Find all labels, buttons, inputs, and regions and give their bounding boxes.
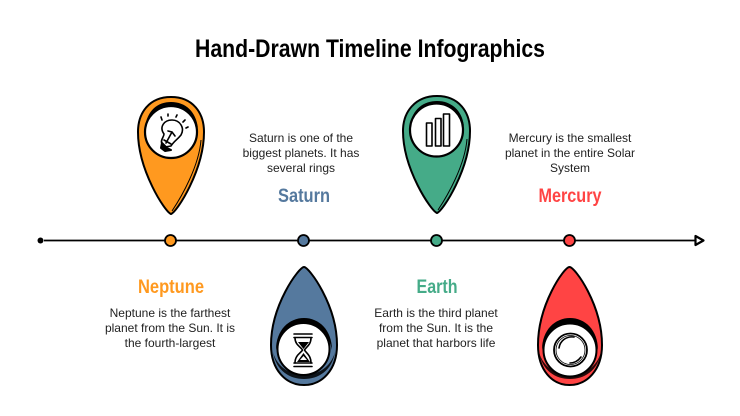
marker: Earth (431, 235, 442, 246)
heading: Neptune: Neptune (138, 277, 204, 298)
pin: Saturn with hourglass icon (271, 267, 337, 385)
heading: Earth: Earth (416, 277, 458, 298)
marker: Neptune (165, 235, 176, 246)
icon: circle (554, 334, 587, 366)
text block: Saturn: Saturn is one of the (249, 131, 353, 145)
icon: hourglass (294, 334, 312, 366)
text block: Neptune (105, 306, 235, 350)
text block: Saturn: biggest planets. It has (243, 146, 359, 160)
heading: Mercury: Mercury (538, 186, 602, 207)
text block: Earth: planet that harbors life (377, 336, 496, 350)
title: Hand-Drawn Timeline Infographics (195, 35, 545, 63)
arrow head (696, 236, 704, 245)
marker: Mercury (564, 235, 575, 246)
text block: Saturn (243, 131, 359, 175)
icon: light bulb (161, 114, 188, 151)
timeline axis (38, 236, 704, 245)
text block: Mercury: System (550, 161, 590, 175)
text block: Earth (374, 306, 498, 350)
text block: Neptune: planet from the Sun. It is (105, 321, 235, 335)
text block: Earth: from the Sun. It is the (379, 321, 493, 335)
heading: Saturn: Saturn (278, 186, 330, 207)
text block: Mercury (505, 131, 635, 175)
text block: Mercury: planet in the entire Solar (505, 146, 635, 160)
text block: Mercury: Mercury is the smallest (509, 131, 632, 145)
pin: Neptune with light bulb icon (138, 97, 204, 214)
text block: Neptune: the fourth-largest (125, 336, 216, 350)
icon: bar chart (426, 114, 450, 146)
text block: Earth: Earth is the third planet (374, 306, 498, 320)
marker: Saturn (298, 235, 309, 246)
pin: Mercury with circle icon (538, 267, 602, 385)
text block: Neptune: Neptune is the farthest (110, 306, 231, 320)
pin: Earth with bar chart icon (403, 96, 470, 213)
text block: Saturn: several rings (267, 161, 335, 175)
